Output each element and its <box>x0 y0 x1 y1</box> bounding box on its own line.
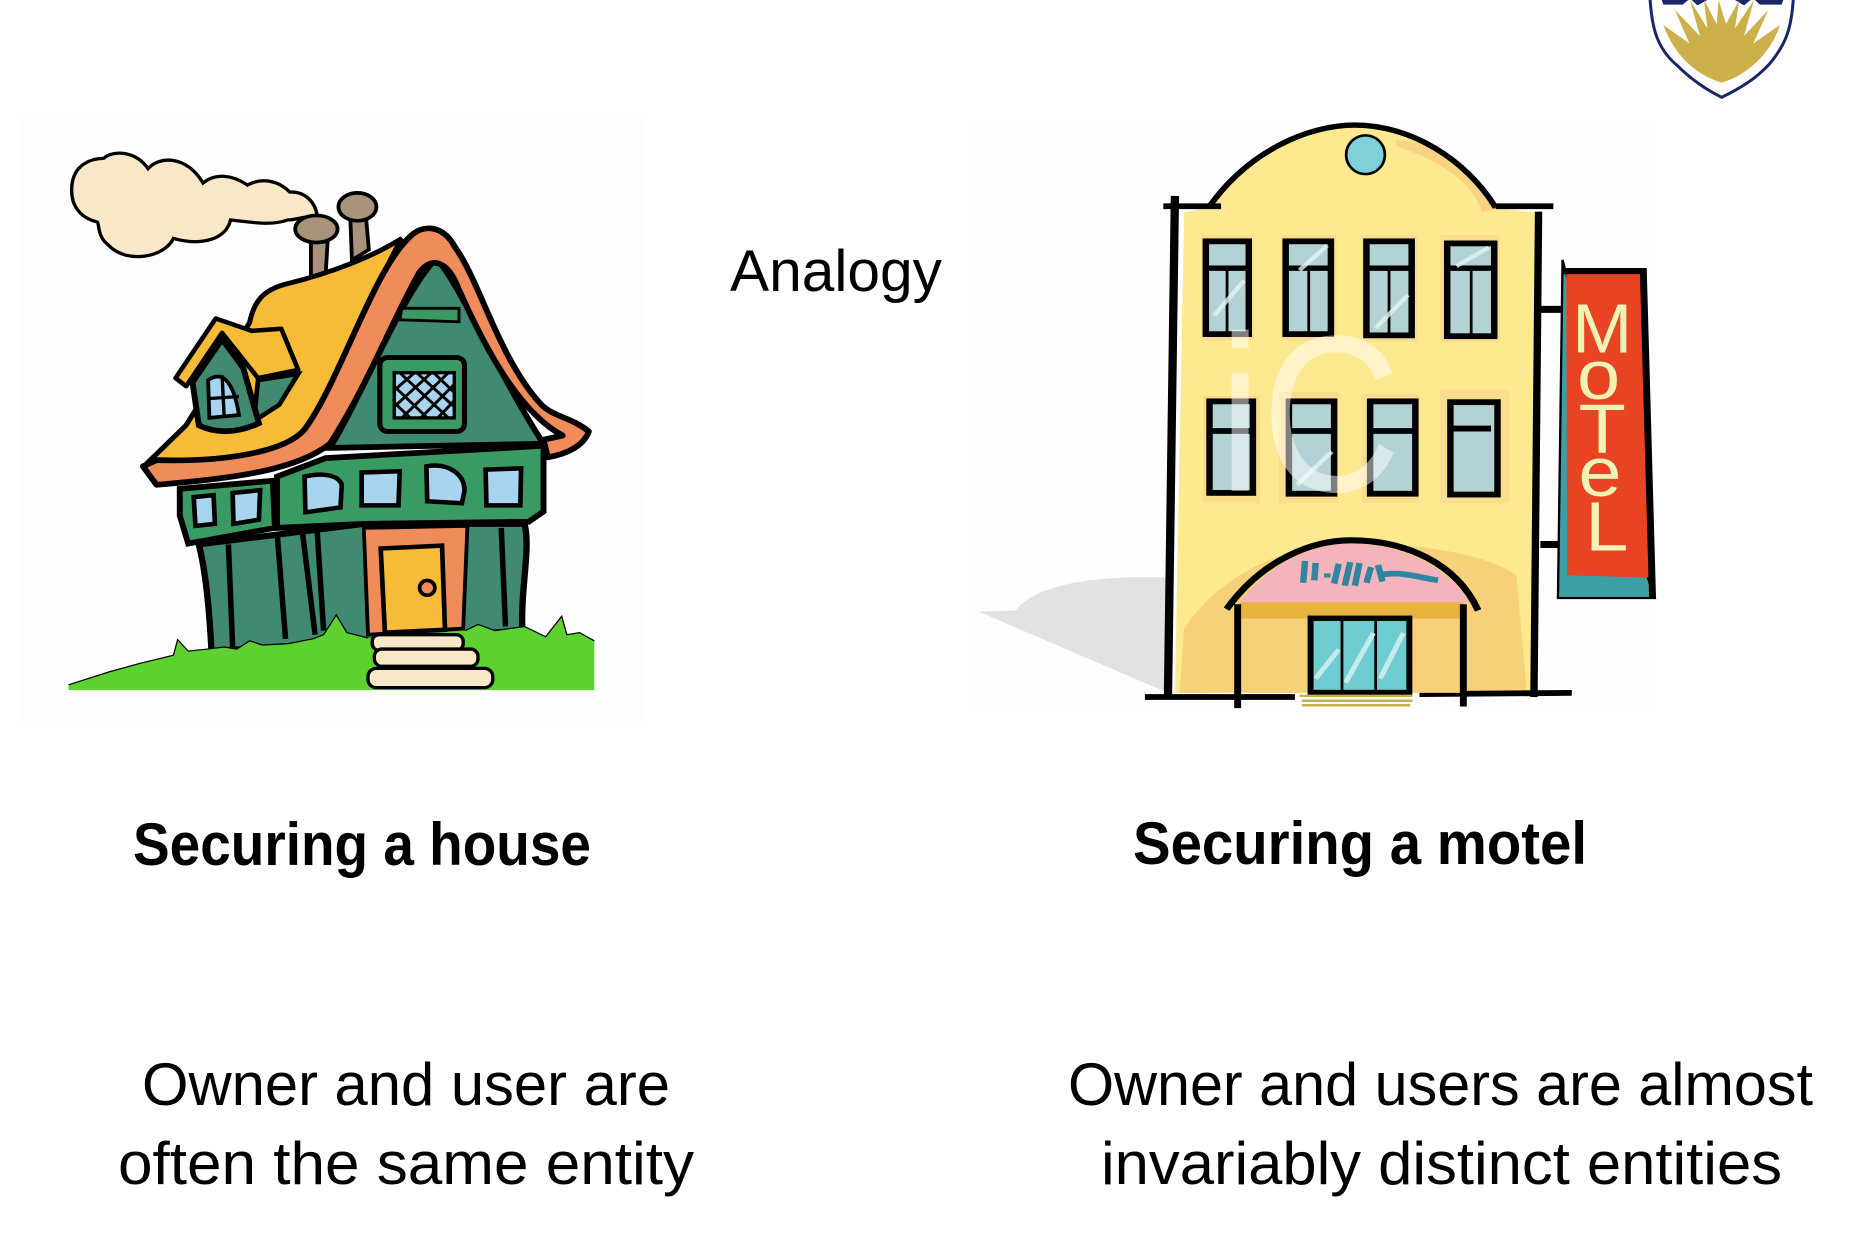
window halos <box>1201 235 1509 503</box>
orange roof trim <box>143 228 589 485</box>
icon: cartoon motel <box>972 122 1655 711</box>
awning <box>1240 543 1470 602</box>
sign lettering: e <box>1578 433 1622 511</box>
lower wall <box>199 524 527 651</box>
sign lettering: L <box>1585 488 1628 566</box>
heading: securing a house: Securing a house <box>133 811 591 878</box>
icon: cartoon house <box>21 117 643 725</box>
building outline <box>1145 125 1572 697</box>
building body <box>1175 126 1537 693</box>
heading: analogy: Analogy <box>730 239 942 304</box>
text block: house description: often the same entity <box>118 1130 694 1197</box>
yellow roof <box>150 238 402 460</box>
text block: motel description <box>1068 1051 1813 1197</box>
heading: securing a motel: Securing a motel <box>1133 810 1587 877</box>
sign lettering: M <box>1572 290 1632 368</box>
door <box>364 526 467 635</box>
chimneys <box>295 193 376 277</box>
band with windows <box>277 446 544 528</box>
text block: house description <box>118 1051 694 1197</box>
round window <box>1346 135 1385 174</box>
watermark: iC <box>1219 290 1401 539</box>
icon: university shield logo <box>1650 0 1793 97</box>
smoke cloud <box>72 153 317 257</box>
text block: house description: Owner and user are <box>142 1051 670 1118</box>
upper gable <box>330 259 544 448</box>
sign lettering <box>1572 290 1632 566</box>
sign lettering: o <box>1577 336 1620 414</box>
lattice window <box>380 358 464 431</box>
grass <box>69 615 594 690</box>
steps <box>368 635 493 688</box>
text block: motel description: invariably distinct entities <box>1101 1130 1782 1197</box>
ground shadow <box>979 577 1168 693</box>
entrance door <box>1311 618 1409 693</box>
sign lettering: T <box>1579 389 1626 468</box>
dormer <box>254 374 298 421</box>
motel sign <box>1540 260 1655 598</box>
windows <box>1206 241 1497 495</box>
text block: motel description: Owner and users are almost <box>1068 1051 1813 1118</box>
